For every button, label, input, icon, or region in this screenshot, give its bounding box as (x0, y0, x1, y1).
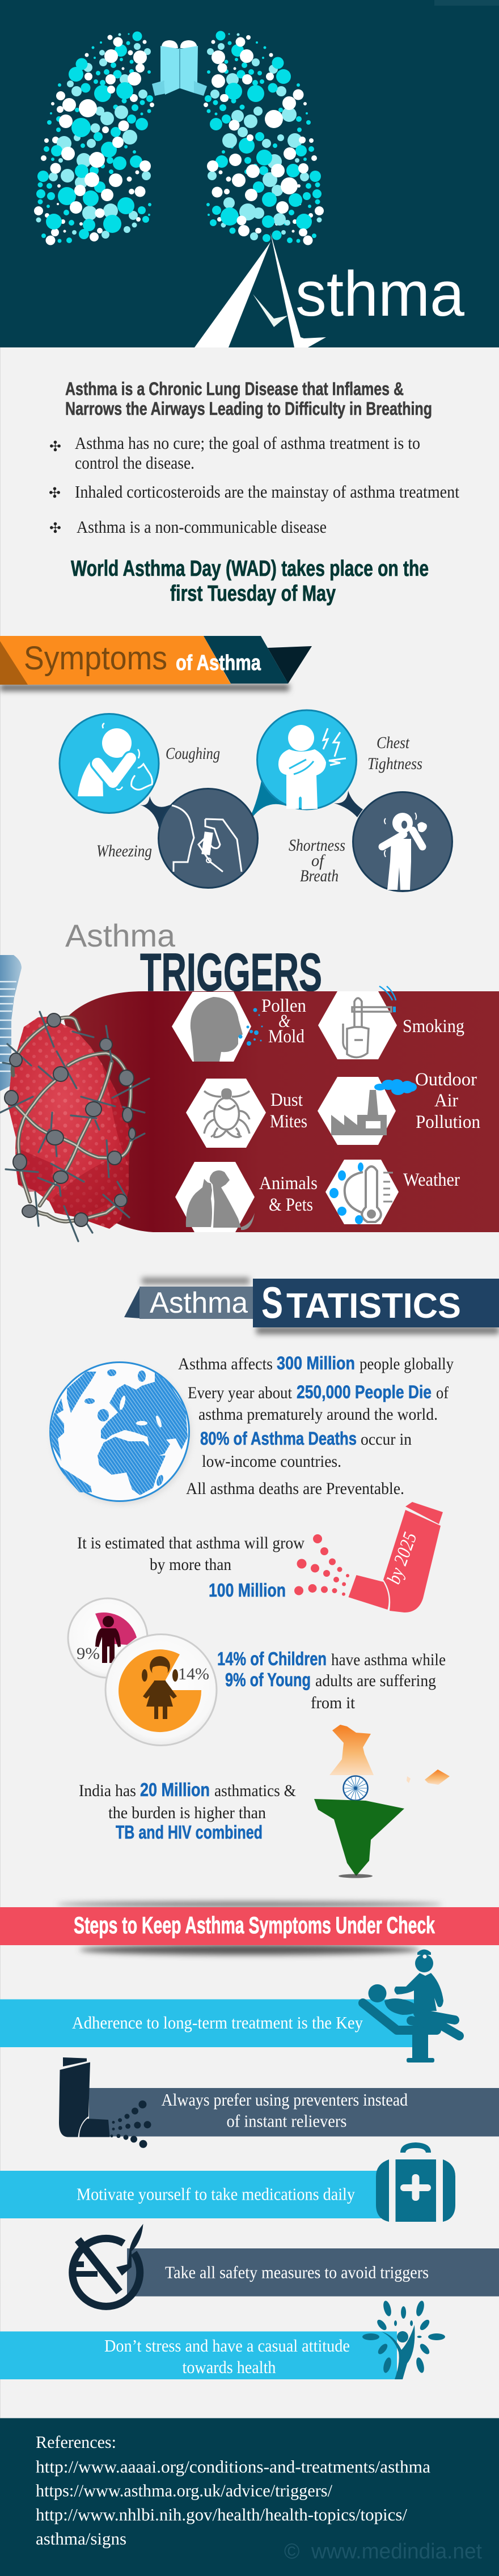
icon: hand with cigarette (343, 986, 396, 1058)
heading: Asthma Statistics banner: S (261, 1278, 283, 1327)
watermark: © www.medindia.net (284, 2540, 482, 2564)
list: asthma facts: control the disease. (75, 453, 194, 473)
step 5: casual attitude (0, 2300, 445, 2379)
text block: growth estimate (77, 1534, 305, 1601)
barbs (0, 1012, 149, 1241)
labels: trigger names: Weather (403, 1170, 460, 1190)
labels: trigger names: Dust (270, 1090, 303, 1110)
chart: children 14%: 14% (178, 1665, 209, 1683)
icon: coughing (60, 714, 159, 813)
labels: trigger names: Outdoor (415, 1070, 477, 1090)
icon: inhaler between lungs (152, 40, 207, 96)
step 4: avoid triggers: Take all safety measures to avoid triggers (165, 2262, 429, 2282)
text block: children and adults: 14% of Children (217, 1648, 327, 1669)
text block: references: http://www.nhlbi.nih.gov/health/health-topics/topics/ (36, 2505, 407, 2524)
step 2: preventers (59, 2057, 499, 2148)
labels: symptom names: Breath (300, 867, 339, 885)
icon: wheezing (159, 789, 257, 888)
diagram: symptoms chain (60, 710, 453, 891)
illustration: lung wrapped in barbed wire (0, 955, 149, 1241)
text block: growth estimate: 100 Million (209, 1580, 286, 1601)
text block: global statistics: people globally (360, 1355, 454, 1373)
title: Asthma wordmark (194, 233, 465, 347)
text block: references: asthma/signs (36, 2529, 126, 2548)
heading: Symptoms of Asthma banner: Symptoms (24, 640, 167, 677)
list: asthma facts: ✣ (49, 485, 61, 501)
text block: children and adults: adults are suffering (315, 1671, 436, 1690)
list: asthma facts: Asthma is a non-communicable disease (77, 517, 327, 537)
heading: Asthma Triggers: TRIGGERS (140, 943, 322, 1003)
icon: no smoking (72, 2224, 143, 2306)
text block: children and adults (217, 1648, 446, 1712)
step 5: casual attitude: towards health (183, 2357, 276, 2377)
chart: young adults 9%: 9% (77, 1644, 100, 1663)
icon: dust mite (204, 1089, 250, 1137)
step 5: casual attitude: Don’t stress and have a casual attitude (104, 2336, 350, 2356)
callout: World Asthma Day (71, 557, 429, 606)
text block: India statistics: TB and HIV combined (116, 1822, 263, 1843)
panel: header (0, 0, 499, 347)
text block: references (36, 2432, 430, 2548)
hexagons (172, 991, 399, 1232)
text block: India statistics: 20 Million (140, 1779, 210, 1800)
title: Asthma wordmark: sthma (295, 258, 465, 329)
icon: head with pollen (191, 997, 263, 1062)
list: asthma facts: Asthma has no cure; the goal of asthma treatment is to (75, 433, 420, 453)
windpipe (0, 955, 22, 1091)
text block: references: https://www.asthma.org.uk/advice/triggers/ (36, 2480, 332, 2501)
chart: young adults 9% (68, 1598, 147, 1678)
text block: India statistics: the burden is higher than (108, 1803, 266, 1822)
icon: doctor with patient (363, 1950, 459, 2063)
labels: trigger names: Pollution (416, 1112, 480, 1132)
text block: India statistics: asthmatics & (214, 1781, 296, 1800)
labels: trigger names: Air (434, 1090, 458, 1111)
text block: global statistics: of (436, 1384, 449, 1402)
labels: symptom names: Wheezing (96, 842, 152, 860)
labels: symptom names: Tightness (367, 754, 422, 773)
text block: global statistics: All asthma deaths are Preventable. (186, 1479, 404, 1498)
icon: red inhaler by 2025 (294, 1502, 443, 1612)
step 4: avoid triggers (72, 2224, 499, 2306)
list: asthma facts: ✣ (49, 520, 61, 536)
labels: symptom names: Coughing (166, 744, 220, 763)
icon: hand-drawn globe (50, 1363, 191, 1504)
text block: global statistics: 250,000 People Die (297, 1382, 432, 1402)
labels: trigger names: Pollen (261, 996, 306, 1016)
text block: references: References: (36, 2432, 116, 2452)
text block: growth estimate: It is estimated that asthma will grow (77, 1534, 305, 1552)
labels: trigger names (259, 996, 480, 1215)
text block: references: http://www.aaaai.org/conditions-and-treatments/asthma (36, 2456, 430, 2477)
step 1: adherence: Adherence to long-term treatment is the Key (72, 2013, 363, 2032)
icon: shortness of breath (353, 792, 453, 891)
step 2: preventers: of instant relievers (227, 2111, 347, 2131)
text block: definition heading (65, 379, 432, 419)
icon: chest tightness (257, 710, 356, 809)
list: asthma facts: Inhaled corticosteroids are the mainstay of asthma treatment (75, 482, 459, 502)
text block: India statistics: India has (79, 1781, 136, 1800)
step 3: medications (0, 2142, 455, 2222)
chart: children 14% (105, 1635, 217, 1746)
illustration: map of India in flag colours (314, 1725, 450, 1878)
callout: World Asthma Day: first Tuesday of May (170, 582, 336, 606)
labels: trigger names: Animals (259, 1173, 318, 1194)
icon: navy inhaler (59, 2057, 151, 2148)
text block: global statistics (178, 1353, 454, 1498)
barb knots (5, 1013, 136, 1227)
labels: trigger names: Mold (268, 1026, 305, 1047)
labels: symptom names: Chest (377, 733, 410, 752)
list: asthma facts: ✣ (49, 438, 61, 455)
illustration: lungs made of bubbles (34, 31, 324, 245)
text block: growth estimate: by more than (150, 1555, 231, 1574)
text block: global statistics: Every year about (188, 1384, 293, 1402)
heading: Steps banner (0, 1902, 499, 1955)
labels: symptom names (96, 733, 422, 885)
labels: symptom names: Shortness (289, 836, 345, 855)
labels: trigger names: Smoking (403, 1016, 464, 1037)
text block: definition heading: Asthma is a Chronic Lung Disease that Inflames & (65, 379, 404, 399)
labels: trigger names: & Pets (269, 1195, 313, 1215)
text block: global statistics: 300 Million (277, 1353, 355, 1373)
heading: Asthma Statistics banner: TATISTICS (286, 1287, 461, 1326)
panel: references footer (0, 2418, 499, 2576)
icon: red inhaler by 2025: by 2025 (383, 1530, 421, 1587)
heading: Symptoms of Asthma banner (0, 636, 312, 691)
text block: global statistics: occur in (361, 1430, 412, 1449)
labels: symptom names: of (311, 851, 325, 870)
text block: children and adults: have asthma while (331, 1650, 446, 1669)
icon: factory with smoke (331, 1079, 417, 1135)
text block: global statistics: 80% of Asthma Deaths (200, 1428, 357, 1449)
heading: Asthma Triggers: Asthma (65, 918, 176, 953)
text block: global statistics: low-income countries. (202, 1452, 341, 1471)
labels: trigger names: & (278, 1011, 290, 1032)
text block: India statistics (79, 1779, 296, 1843)
heading: Asthma Statistics banner: Asthma (150, 1287, 248, 1319)
icon: medical bag (376, 2142, 455, 2222)
icon: tree person (362, 2300, 445, 2379)
text block: global statistics: asthma prematurely around the world. (198, 1405, 438, 1424)
step 3: medications: Motivate yourself to take medications daily (77, 2184, 355, 2204)
text block: children and adults: 9% of Young (225, 1669, 311, 1690)
heading: Asthma Statistics banner (124, 1278, 499, 1334)
text block: children and adults: from it (311, 1694, 356, 1712)
heading: Symptoms of Asthma banner: of Asthma (176, 651, 261, 675)
heading: Asthma Triggers (65, 918, 322, 1003)
step 1: adherence (0, 1950, 459, 2063)
icon: cat and dog (186, 1170, 255, 1230)
panel: triggers (64, 986, 499, 1232)
icon: weather thermometer (329, 1162, 393, 1224)
text block: global statistics: Asthma affects (178, 1355, 273, 1373)
list: asthma facts (49, 433, 459, 537)
labels: trigger names: Mites (270, 1111, 307, 1132)
step 2: preventers: Always prefer using preventers instead (161, 2090, 408, 2110)
barbed wire strands (12, 1017, 132, 1221)
